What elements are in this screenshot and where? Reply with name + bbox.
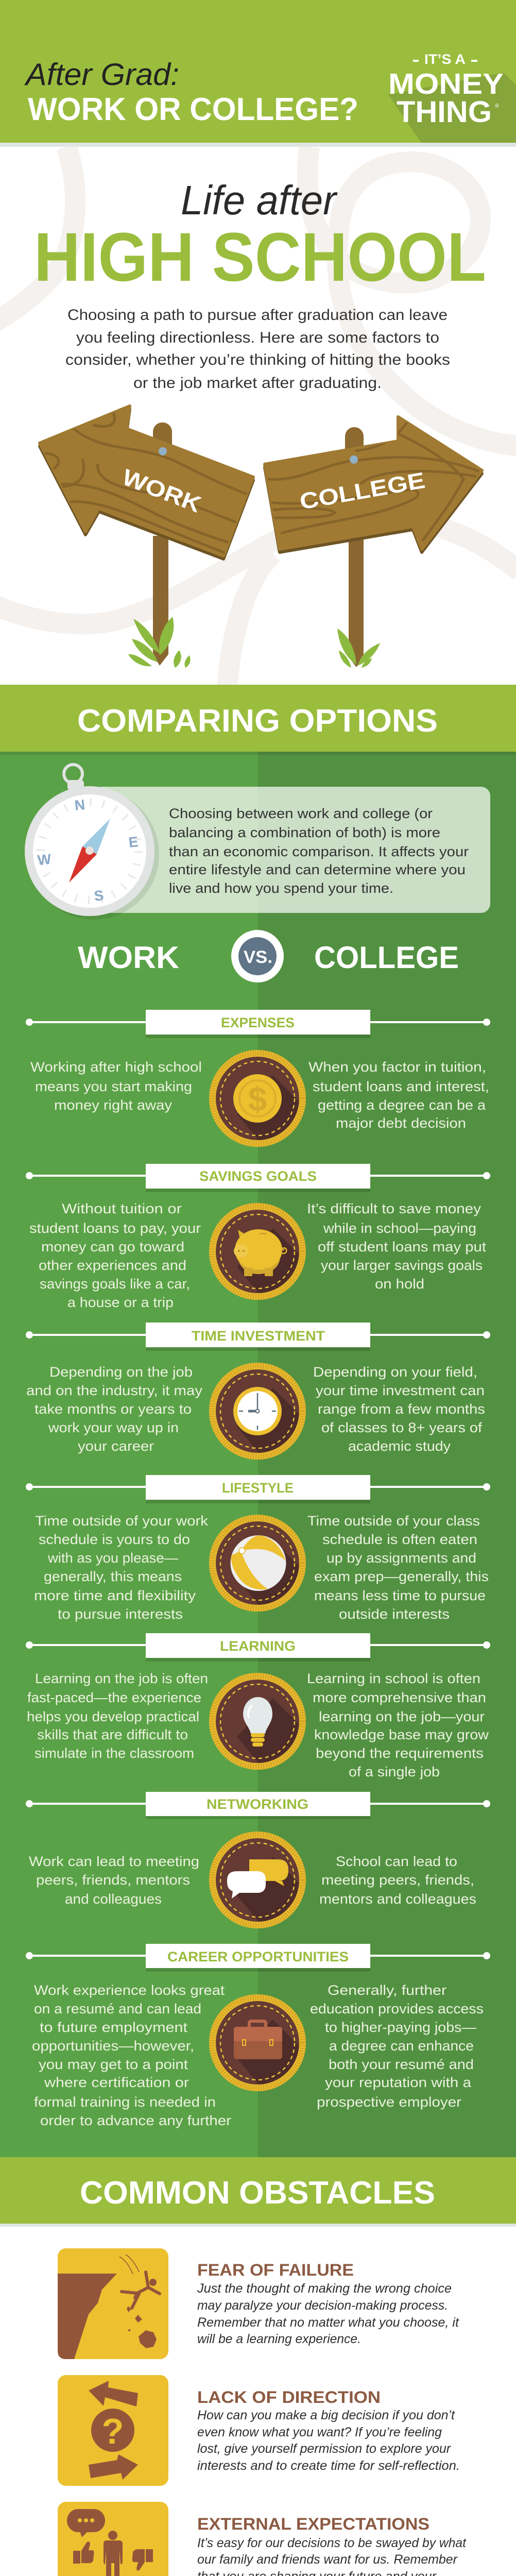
- text: external expectations: our family and friends want for us. Remember: [197, 2552, 458, 2567]
- text: college time: range from a few months: [318, 1401, 485, 1417]
- callout text: [169, 806, 469, 896]
- sign label: work: WORK: [118, 465, 205, 518]
- text: work time: work your way up in: [48, 1420, 179, 1435]
- row banner: networking: NETWORKING: [207, 1797, 308, 1812]
- text: college time: [313, 1364, 485, 1454]
- icon: coin medallion: $: [248, 1080, 267, 1118]
- icon: piggy bank medallion: [209, 1203, 306, 1300]
- obstacle: fear of failure: FEAR OF FAILURE: [197, 2261, 354, 2279]
- text: work savings: [29, 1201, 201, 1310]
- text: college learning: learning on the job—your: [319, 1709, 485, 1724]
- row: lifestyle: [26, 1475, 490, 1622]
- nail: [350, 455, 358, 464]
- intro text: consider, whether you’re thinking of hitting the books: [65, 351, 450, 368]
- row banner: time investment: TIME INVESTMENT: [192, 1328, 325, 1344]
- heading band: common obstacles: [0, 2157, 516, 2227]
- logo: it's a money thing: MONEY: [388, 67, 504, 100]
- intro text: Choosing a path to pursue after graduation can leave: [67, 307, 448, 324]
- row banner: career opportunities: [26, 1944, 490, 1972]
- icon: arrows and question mark: [58, 2375, 168, 2486]
- text: work career: to future employment: [40, 2020, 188, 2035]
- text: college expenses: getting a degree can be a: [318, 1097, 486, 1113]
- text: college lifestyle: schedule is often eaten: [322, 1532, 477, 1547]
- icon: person with opinions: [58, 2502, 168, 2576]
- text: work learning: helps you develop practical: [27, 1709, 199, 1724]
- comparison heading: work vs college: WORK: [78, 940, 179, 975]
- text: work networking: Work can lead to meeting: [29, 1854, 199, 1869]
- text: work learning: [27, 1671, 208, 1761]
- text: work time: take months or years to: [35, 1401, 192, 1417]
- text: college career: both your resumé and: [329, 2057, 474, 2072]
- text: work savings: Without tuition or: [62, 1201, 182, 1216]
- header title: After Grad:: [24, 57, 179, 92]
- text: college career: a degree can enhance: [329, 2038, 474, 2054]
- signpost: college: [265, 417, 482, 668]
- text: college career: your reputation with a: [325, 2075, 472, 2090]
- text: work learning: Learning on the job is often: [35, 1671, 208, 1686]
- text: fear of failure: [197, 2281, 459, 2346]
- row: savings goals: [26, 1164, 490, 1310]
- text: lack of direction: lost, give yourself permission to explore your: [197, 2442, 452, 2456]
- text: college lifestyle: [307, 1513, 489, 1622]
- logo: it's a money thing: [388, 52, 504, 129]
- row banner: lifestyle: LIFESTYLE: [222, 1480, 294, 1496]
- text: college learning: more comprehensive than: [313, 1690, 486, 1705]
- text: work career: Work experience looks great: [34, 1982, 225, 1998]
- text: college lifestyle: Time outside of your class: [307, 1513, 480, 1529]
- text: work networking: peers, friends, mentors: [36, 1872, 190, 1888]
- text: college lifestyle: exam prep—generally, this: [314, 1569, 489, 1584]
- row: networking: [26, 1792, 490, 1928]
- text: college learning: Learning in school is often: [307, 1671, 480, 1686]
- text: work savings: student loans to pay, your: [29, 1221, 201, 1236]
- text: work networking: [29, 1854, 199, 1907]
- row banner: career opportunities: CAREER OPPORTUNITIES: [167, 1949, 349, 1964]
- icon: briefcase medallion: [209, 1994, 306, 2091]
- sign label: college: COLLEGE: [298, 468, 427, 515]
- text: work expenses: money right away: [54, 1097, 173, 1113]
- text: college time: of classes to 8+ years of: [321, 1420, 483, 1435]
- text: college savings: your larger savings goals: [321, 1258, 483, 1273]
- icon: falling off cliff: [58, 2248, 168, 2359]
- text: work lifestyle: more time and flexibility: [34, 1588, 196, 1603]
- text: work learning: skills that are difficult to: [37, 1727, 188, 1742]
- row banner: expenses: [26, 1010, 490, 1038]
- callout: work vs college intro: [25, 765, 490, 920]
- text: college time: Depending on your field,: [313, 1364, 477, 1380]
- intro text: or the job market after graduating.: [133, 375, 382, 392]
- text: college savings: off student loans may put: [318, 1239, 487, 1255]
- grass: right: [337, 629, 380, 668]
- text: work learning: fast-paced—the experience: [27, 1690, 201, 1705]
- text: college learning: knowledge base may grow: [314, 1727, 489, 1742]
- text: college networking: meeting peers, friends,: [321, 1872, 474, 1888]
- text: work time: Depending on the job: [49, 1364, 193, 1380]
- title: [34, 177, 486, 296]
- text: fear of failure: may paralyze your decision-making process.: [197, 2298, 448, 2313]
- intro text: [65, 307, 450, 392]
- text: work lifestyle: Time outside of your work: [35, 1513, 209, 1529]
- grass: left: [128, 617, 191, 668]
- text: college expenses: [308, 1059, 489, 1131]
- row: learning: [26, 1633, 490, 1780]
- text: work lifestyle: with as you please—: [47, 1550, 178, 1566]
- row: time investment: [26, 1323, 490, 1460]
- row banner: lifestyle: [26, 1475, 490, 1503]
- row: expenses: [26, 1010, 490, 1147]
- obstacle: fear of failure: [58, 2248, 459, 2359]
- text: work learning: simulate in the classroom: [35, 1745, 194, 1761]
- nail: [159, 447, 167, 455]
- icon: compass: E: [128, 834, 139, 851]
- logo: it's a money thing: THING: [397, 95, 492, 129]
- obstacle: lack of direction: LACK OF DIRECTION: [197, 2388, 381, 2406]
- text: college lifestyle: up by assignments and: [326, 1550, 476, 1566]
- comparison heading: work vs college: VS.: [244, 947, 272, 967]
- text: work expenses: means you start making: [35, 1079, 192, 1094]
- text: work savings: a house or a trip: [67, 1295, 174, 1310]
- comparison heading: work vs college: [78, 930, 459, 982]
- row banner: savings goals: [26, 1164, 490, 1192]
- icon: arrows and question mark: ?: [102, 2411, 124, 2451]
- text: work lifestyle: to pursue interests: [58, 1606, 183, 1622]
- text: college learning: beyond the requirements: [316, 1745, 484, 1761]
- comparison heading: work vs college: COLLEGE: [314, 940, 459, 975]
- text: work career: where certification or: [44, 2075, 189, 2090]
- text: work expenses: Working after high school: [30, 1059, 202, 1075]
- icon: coin medallion: [209, 1050, 306, 1147]
- text: college networking: [319, 1854, 476, 1907]
- icon: light bulb medallion: [209, 1673, 306, 1770]
- text: college career: to higher-paying jobs—: [325, 2020, 476, 2035]
- text: external expectations: [197, 2536, 467, 2576]
- header title: [24, 57, 358, 127]
- text: work time: [26, 1364, 203, 1454]
- text: work lifestyle: schedule is yours to do: [39, 1532, 190, 1547]
- logo: it's a money thing: IT’S A: [424, 52, 466, 67]
- text: college savings: on hold: [375, 1276, 424, 1292]
- callout text: entire lifestyle and can determine where you: [169, 862, 466, 877]
- panel: top header band: [0, 0, 516, 147]
- text: college savings: while in school—paying: [323, 1221, 476, 1236]
- text: work networking: and colleagues: [65, 1891, 162, 1907]
- text: work lifestyle: [34, 1513, 209, 1622]
- text: work career: you may get to a point: [39, 2057, 188, 2072]
- callout text: live and how you spend your time.: [169, 880, 393, 896]
- obstacle: lack of direction: [58, 2375, 460, 2486]
- callout text: Choosing between work and college (or: [169, 806, 433, 821]
- text: fear of failure: Just the thought of making the wrong choice: [197, 2281, 452, 2296]
- text: college savings: It’s difficult to save money: [307, 1201, 481, 1216]
- icon: beach ball medallion: [209, 1515, 306, 1612]
- obstacle: external expectations: [58, 2502, 467, 2576]
- text: work lifestyle: generally, this means: [44, 1569, 182, 1584]
- text: college career: Generally, further: [328, 1982, 446, 1998]
- icon: clock medallion: [209, 1363, 306, 1460]
- text: college networking: mentors and colleagues: [319, 1891, 476, 1907]
- heading band: common obstacles: COMMON OBSTACLES: [80, 2175, 435, 2211]
- logo: it's a money thing: ®: [495, 103, 499, 109]
- text: work time: your career: [78, 1438, 154, 1454]
- text: college career: [310, 1982, 484, 2110]
- text: lack of direction: even know what you want? If you’re feeling: [197, 2425, 442, 2439]
- text: college savings: [307, 1201, 487, 1292]
- row banner: learning: LEARNING: [220, 1638, 296, 1654]
- text: lack of direction: [197, 2408, 460, 2473]
- text: work career: opportunities—however,: [32, 2038, 194, 2054]
- text: work expenses: [30, 1059, 202, 1113]
- text: fear of failure: will be a learning experience.: [197, 2332, 361, 2346]
- text: work savings: savings goals like a car,: [40, 1276, 190, 1292]
- icon: speech bubbles medallion: [209, 1832, 306, 1928]
- text: external expectations: It’s easy for our decisions to be swayed by what: [197, 2536, 467, 2550]
- icon: compass: [25, 765, 154, 916]
- header title: WORK OR COLLEGE?: [28, 92, 358, 127]
- obstacle: external expectations: EXTERNAL EXPECTATIONS: [197, 2515, 429, 2533]
- row banner: learning: [26, 1633, 490, 1662]
- text: lack of direction: How can you make a big decision if you don’t: [197, 2408, 455, 2422]
- text: college time: academic study: [348, 1438, 451, 1454]
- text: lack of direction: interests and to create time for self-reflection.: [197, 2459, 460, 2473]
- text: college lifestyle: means less time to pursue: [314, 1588, 486, 1603]
- text: college career: prospective employer: [317, 2094, 461, 2110]
- text: college time: your time investment can: [316, 1383, 485, 1398]
- background swirl path: [0, 147, 516, 688]
- text: work savings: money can go toward: [41, 1239, 184, 1255]
- signpost: work: [40, 406, 255, 668]
- row banner: expenses: EXPENSES: [221, 1015, 295, 1030]
- row banner: time investment: [26, 1323, 490, 1351]
- icon: compass: N: [74, 796, 86, 814]
- text: college networking: School can lead to: [336, 1854, 457, 1869]
- text: college lifestyle: outside interests: [339, 1606, 450, 1622]
- text: college learning: of a single job: [349, 1764, 440, 1780]
- title: Life after: [181, 177, 338, 223]
- text: work career: order to advance any further: [40, 2113, 231, 2128]
- intro text: you feeling directionless. Here are some factors to: [76, 329, 439, 346]
- text: college expenses: major debt decision: [336, 1115, 466, 1131]
- text: college career: education provides access: [310, 2001, 484, 2016]
- text: work career: [32, 1982, 231, 2128]
- text: work time: and on the industry, it may: [26, 1383, 203, 1398]
- icon: compass: S: [93, 887, 105, 904]
- callout text: than an economic comparison. It affects your: [169, 844, 469, 859]
- callout text: balancing a combination of both) is more: [169, 825, 440, 840]
- title: HIGH SCHOOL: [34, 219, 486, 296]
- row: career opportunities: [26, 1944, 490, 2128]
- row banner: networking: [26, 1792, 490, 1819]
- row banner: savings goals: SAVINGS GOALS: [199, 1168, 317, 1184]
- heading band: comparing options: COMPARING OPTIONS: [77, 703, 438, 739]
- icon: compass: W: [37, 851, 52, 868]
- text: college expenses: When you factor in tuition,: [308, 1059, 486, 1075]
- text: college expenses: student loans and interest,: [313, 1079, 489, 1094]
- heading band: comparing options: [0, 685, 516, 755]
- text: work career: on a resumé and can lead: [34, 2001, 201, 2016]
- text: work savings: other experiences and: [39, 1258, 186, 1273]
- panel: comparing options background: [0, 752, 516, 2157]
- text: fear of failure: Remember that no matter what you choose, it: [197, 2315, 459, 2330]
- text: college learning: [307, 1671, 489, 1780]
- text: work career: formal training is needed in: [34, 2094, 216, 2110]
